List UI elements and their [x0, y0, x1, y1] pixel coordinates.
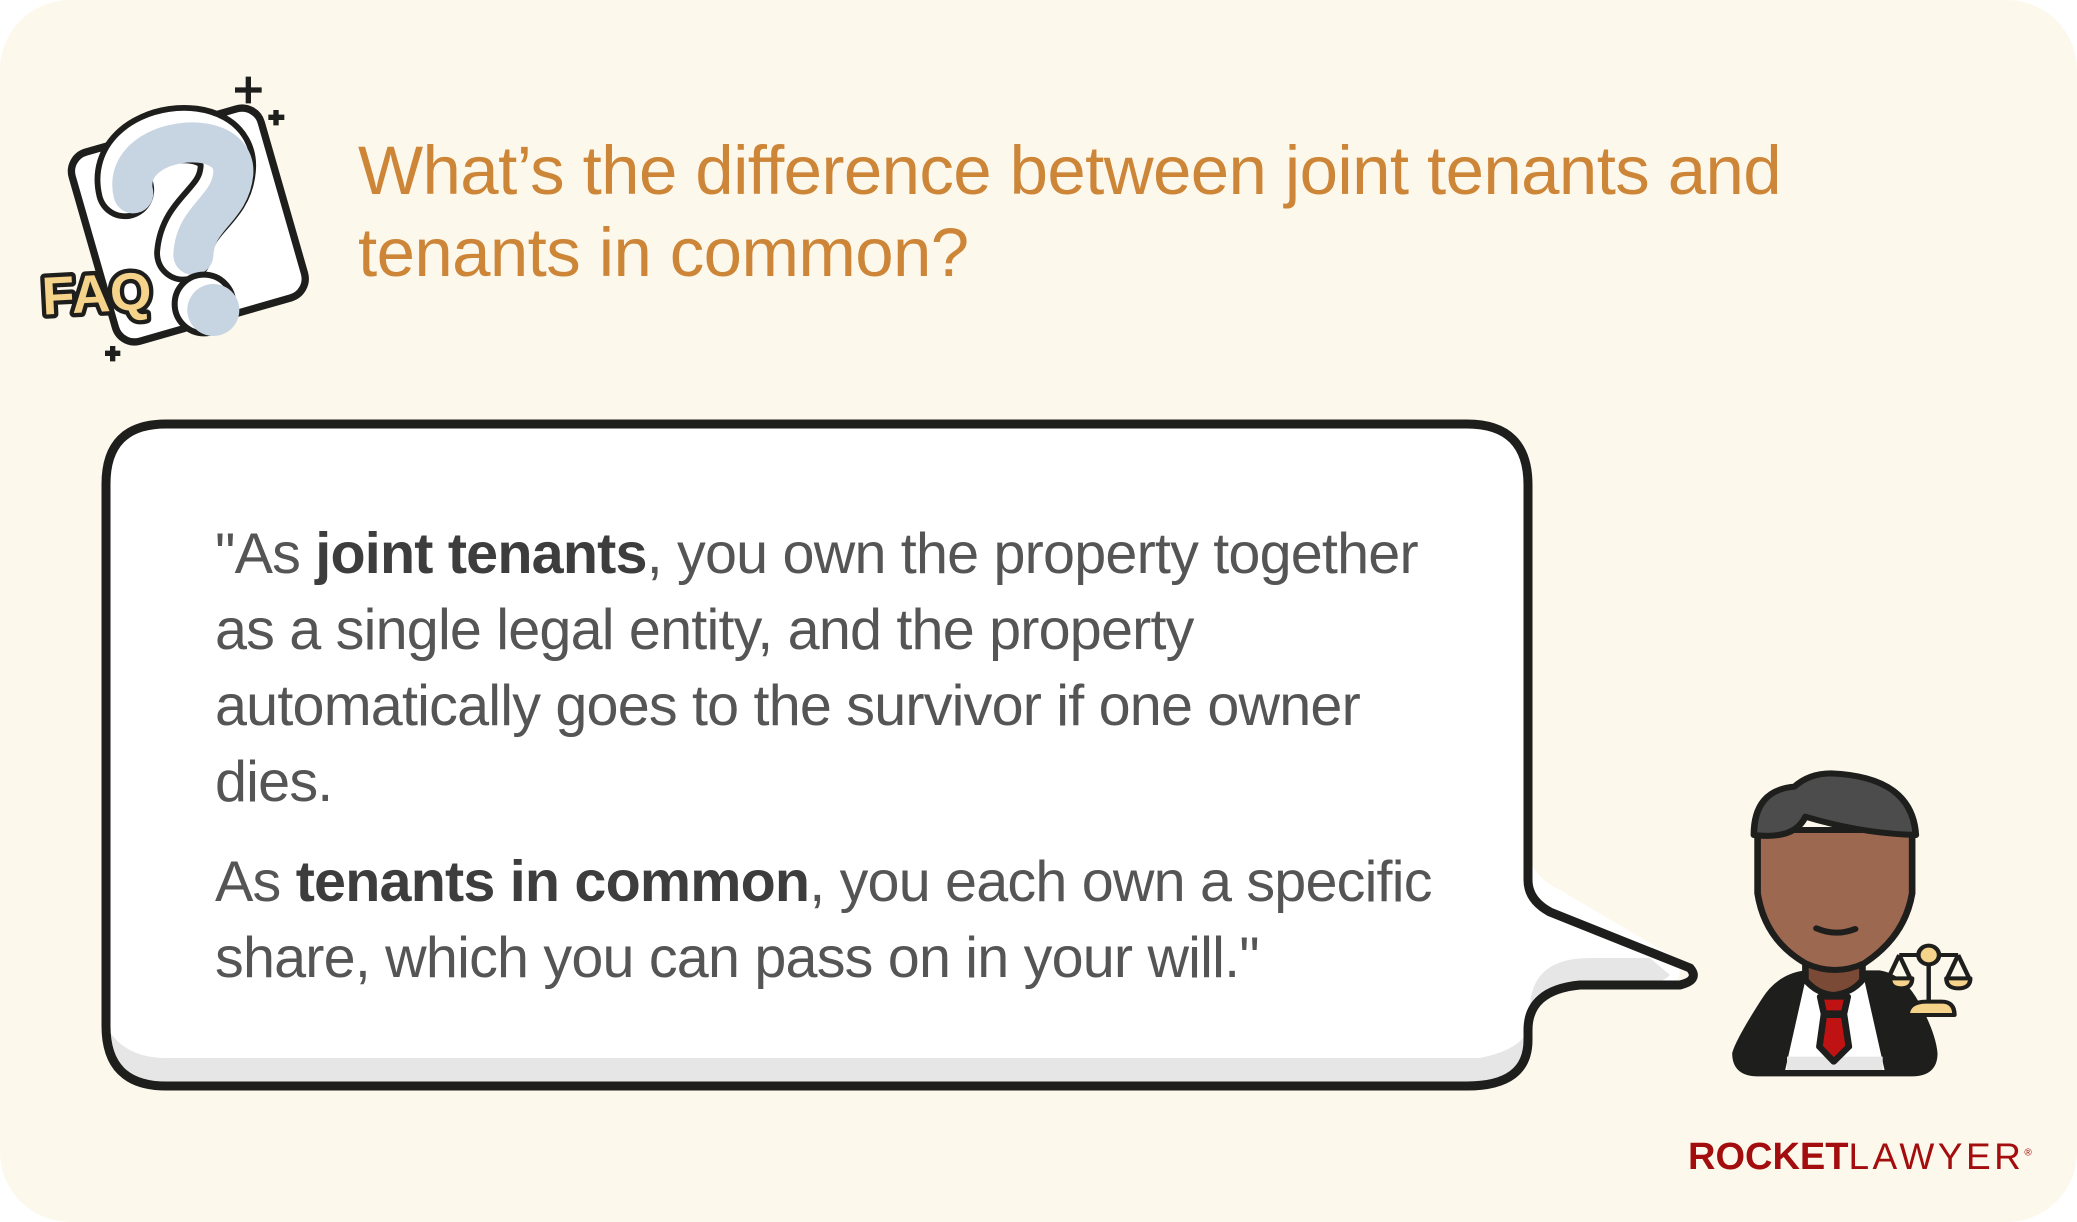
quote text: share, which you can pass on in your will." [215, 926, 1259, 990]
question mark [124, 134, 233, 255]
quote text: automatically goes to the survivor if one owner [215, 674, 1360, 738]
quote text [215, 522, 1432, 990]
title: What’s the difference between joint tenants and [358, 132, 1781, 209]
quote text: as a single legal entity, and the property [215, 598, 1194, 662]
title [358, 132, 1781, 291]
scales [1888, 946, 1970, 1015]
quote text: As tenants in common, you each own a specific [215, 850, 1432, 914]
body [1736, 973, 1934, 1073]
icon: lawyer with scales [1732, 770, 1972, 1076]
tie [1820, 997, 1848, 1013]
quote text: "As joint tenants, you own the property together [215, 522, 1418, 586]
FAQ label: FAQ [40, 262, 153, 327]
icon: FAQ question mark [40, 76, 309, 362]
hair [1754, 773, 1916, 836]
title: tenants in common? [358, 214, 969, 291]
logo: ROCKETLAWYER® [1688, 1136, 2032, 1178]
neck [1805, 960, 1862, 995]
face [1758, 830, 1912, 970]
quote text: dies. [215, 750, 332, 814]
rotated card [67, 103, 310, 347]
sparkles [105, 77, 284, 361]
